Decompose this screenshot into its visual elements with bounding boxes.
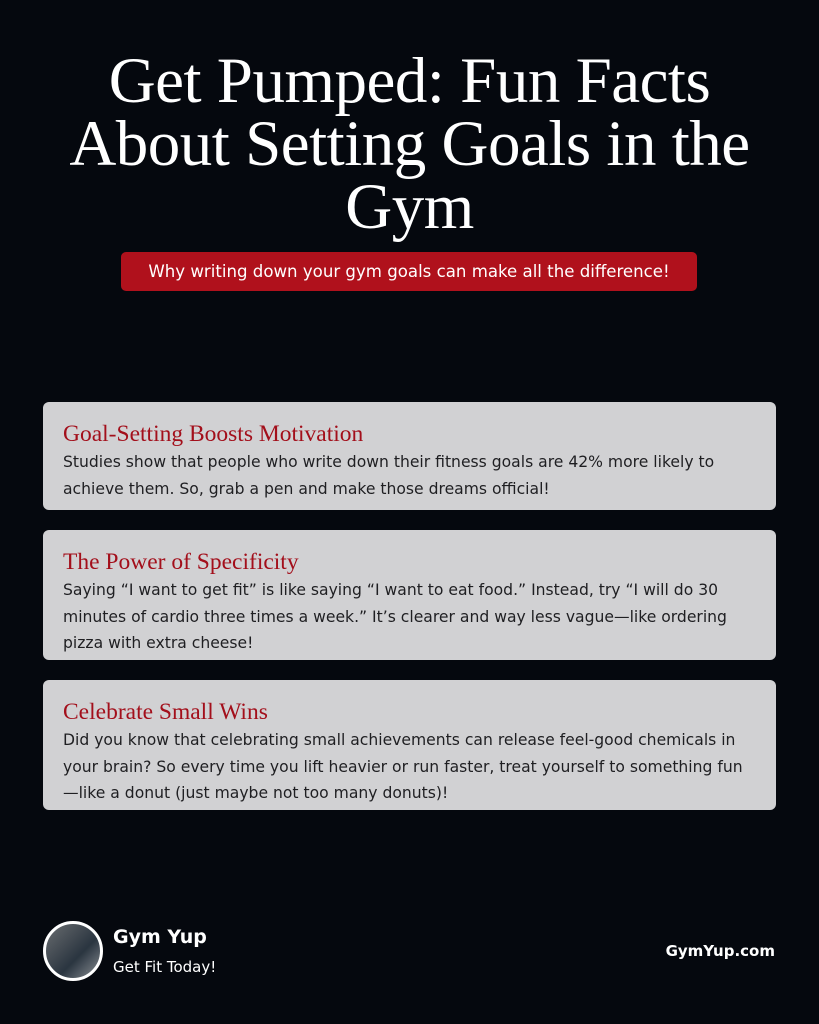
heading: The Power of Specificity [63,549,299,575]
text block: Studies show that people who write down their fitness goals are 42% more likely to achieve them. So, grab a pen and make those dreams official! [63,453,714,498]
title: Get Pumped: Fun Facts [109,45,710,117]
panel: specificity [43,530,776,660]
brand name: Gym Yup [113,926,207,948]
website: GymYup.com [666,942,775,960]
title: Gym [345,171,474,243]
panel: small wins [43,680,776,810]
panel: goal-setting [43,402,776,510]
tagline: Get Fit Today! [113,958,216,976]
subtitle banner [121,252,697,291]
text block: Did you know that celebrating small achievements can release feel-good chemicals in your brain? So every time you lift heavier or run faster, treat yourself to something fun —like a donut (just maybe not too many donuts)! [63,731,743,802]
title [69,45,750,243]
title: About Setting Goals in the [69,108,750,180]
text block: Saying “I want to get fit” is like saying “I want to eat food.” Instead, try “I will do 30 minutes of cardio three times a week.” It’s clearer and way less vague—like ordering pizza with extra cheese! [63,581,727,652]
subtitle banner: Why writing down your gym goals can make all the difference! [148,262,670,281]
icon: avatar [43,921,103,981]
heading: Celebrate Small Wins [63,699,268,725]
heading: Goal-Setting Boosts Motivation [63,421,363,447]
